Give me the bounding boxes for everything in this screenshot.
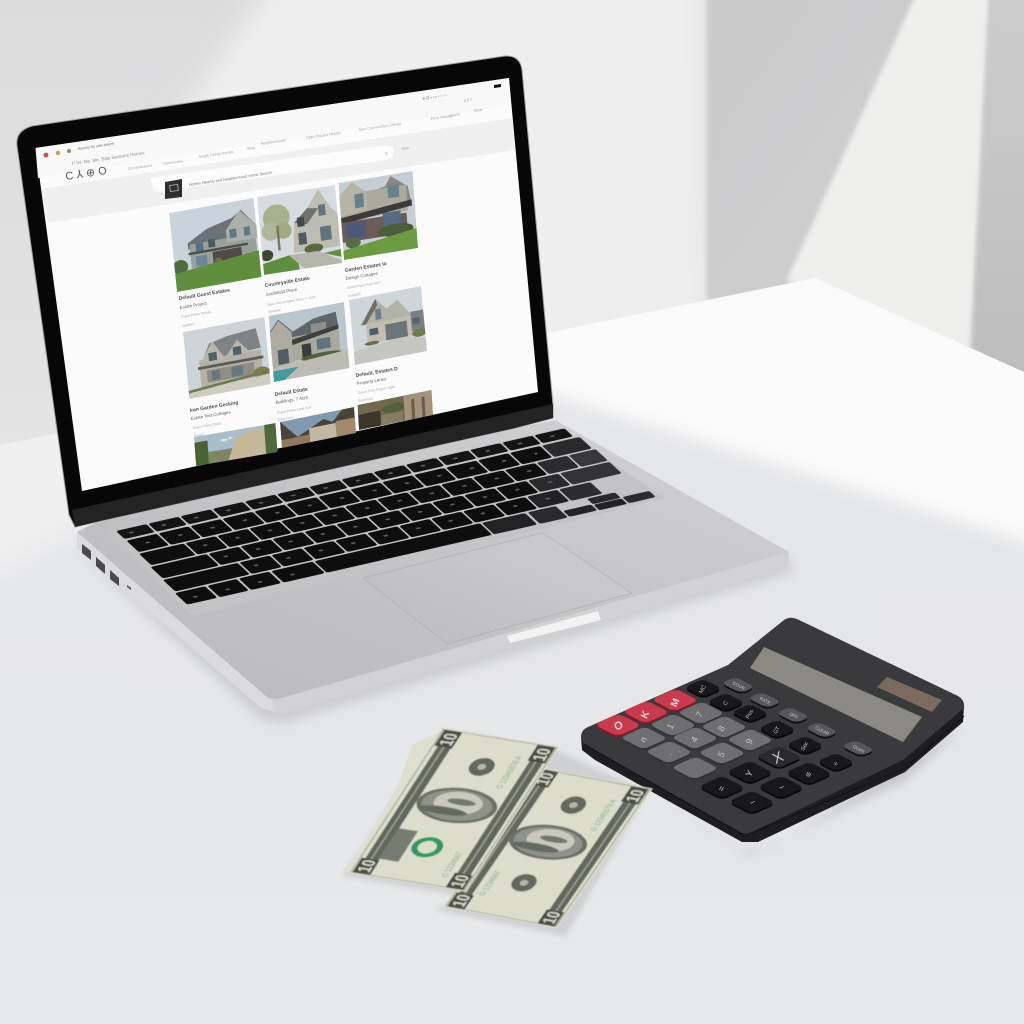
calculator key labels: OFF [789,711,799,720]
calculator key labels: Quant [852,744,866,754]
address bar [150,145,394,192]
solar panel [877,677,942,712]
browser header text: f l hs. ble. ble. Sale Sections Homes [71,150,146,166]
listing card 1 text: Default Guest Estates [178,287,231,302]
calculator key labels: 7 [694,710,705,719]
bill serials [477,787,619,907]
browser header text: Price History [431,114,452,121]
dollar bill front [348,728,560,892]
bill denomination [352,730,558,890]
listing card 3 photo [338,171,418,260]
bill denomination: 10 [436,732,463,747]
listing card 4 text: Guest Prices Detail [193,421,222,430]
calculator key labels: 4 [689,735,700,744]
listing card 3 text: Updated [348,292,361,298]
bill serials: G 1234567 [477,870,503,896]
keyboard keys [109,425,656,605]
listing card 4 text [189,400,239,438]
trackpad [363,533,632,644]
laptop [17,56,789,714]
calculator body edge [581,706,964,842]
calculator display [750,647,922,742]
calculator key labels: − [748,797,757,808]
lid hinge band [72,404,553,527]
laptop lid [17,56,553,527]
listing card 4 photo [183,317,271,399]
listing card 1 text: Estate Project [179,300,208,310]
browser header text: Townhouses [163,159,184,166]
wall background [0,0,1024,460]
black keys [684,679,855,813]
calculator key labels: K [639,709,653,721]
calculator key labels: ≡ [803,770,814,779]
listing card 6 text: Guest Price Report Table [358,385,396,395]
side ports [82,544,131,590]
calculator key labels: O [612,719,626,734]
listing card 4 text: Iran Garden Gecking [189,400,239,414]
calculator key labels: RATE [759,696,772,706]
calculator key labels [612,680,866,808]
calculator key labels: Sec [800,741,810,752]
listing card 1 text: Updated [182,322,195,328]
bill denomination [447,769,651,927]
calculator seam [585,716,964,836]
calculator key labels: 9 [744,737,755,746]
bill seal [464,756,499,778]
function keys [721,677,875,756]
cash shadow [342,730,648,936]
trackpad notch [507,611,601,643]
listing card 2 photo [255,185,342,275]
calculator key labels: CLEAR [814,725,831,737]
listing card 6 text: Default, Estates D [355,366,399,379]
listing card 5 text: Guest Prices Land Sort [277,405,312,415]
green seal [410,837,444,857]
listing card 5 text: Buildings, 7 Acre [275,395,309,405]
calculator key labels: − [777,782,786,793]
listing card 5 text: Default Estate [274,387,308,398]
calculator key labels: 1 [665,722,676,731]
bill denomination: 10 [529,747,556,762]
browser toolbar icons [422,84,501,103]
calculator key labels: ÷ [831,759,841,768]
bill border lines [446,769,650,927]
bill denomination: 10 [539,910,566,925]
browser tool bar band [41,118,515,223]
listing card 3 text: Garden Estates Io [344,261,387,274]
bill denomination: 10 [622,788,649,804]
listing card 9 photo [358,390,433,430]
calculator [581,618,964,842]
keyboard well [108,428,664,616]
listing card 3 text: Design Cottages [345,271,379,281]
listing card 2 text: Countryside Estate [264,275,310,289]
listing card 2 text: Updated [268,308,281,314]
browser header text: Agents [449,112,461,118]
table surface [0,278,1024,562]
bill seals [503,795,594,893]
calculator top face [581,618,964,834]
calculator key labels: = [716,784,727,793]
bill denomination: 10 [447,873,474,889]
listing card 4 text: Project [194,432,205,438]
bill serials [436,755,527,878]
listing card 1 text [178,287,231,328]
listing card 1 photo [167,198,262,292]
site logo [165,179,182,199]
gray keys [620,702,774,779]
calculator key labels: COUN [732,680,746,691]
listing card 2 text [264,275,315,314]
listing card 3 text: Detail Prices Add Sell T [347,280,382,290]
calculator key labels: Y [744,768,755,779]
browser header text: C ⅄ ⊕ O [65,165,108,183]
browser toolbar icons: d 0 f [463,97,473,103]
laptop base [77,420,789,714]
browser header text: Open Houses Nearby [306,131,341,140]
bill portrait [499,819,597,865]
calculator key labels: . [670,747,672,757]
listing card 1 text: Guest Prices Details [181,310,212,319]
listing card 6 text: Download [358,397,373,403]
calculator key labels: 8 [716,724,727,733]
browser header text: New Construction Listings [359,122,401,132]
bill denomination: 10 [532,771,559,787]
browser header text: Neighborhoods [261,138,286,146]
calculator key labels: C [723,700,730,707]
listing card 6 photo [349,286,428,365]
listing card 2 text: Southfield Place [265,287,298,297]
bill serials: G 12345678 A [589,799,619,832]
window controls [44,149,71,157]
listing card 7 photo [194,423,278,466]
browser tab strip [36,78,511,178]
listing card 8 photo [280,407,356,448]
browser header text: Condominiums [128,163,153,171]
calculator key labels: Pos [745,709,755,720]
red keys [594,689,699,736]
listing card 3 text [344,261,387,298]
bill serials: G 12345678 A [493,755,524,790]
listing card 2 text: Open House Agent Save — Sort [267,295,315,307]
browser toolbar icons: b ⊟ ▪ ▭ ▫ ▫ ▫ ▫ [422,92,448,101]
laptop screen [36,78,538,491]
calculator key labels: M [669,697,682,709]
listing card 5 text: Data Form [278,415,294,422]
listing card 6 text: Property Lanes [356,376,387,386]
listing card 4 text: Estate Test Cottages [190,409,232,421]
bill border lines [351,729,557,890]
browser header text: More [474,108,482,113]
site search line: Homes Nearby and Neighborhood Home Search [188,170,272,187]
money stack underneath [342,728,472,880]
browser header text: Houses for sale search [78,142,115,151]
screen base [36,78,538,491]
calculator key labels: X [770,748,786,768]
browser header text: Sale [402,146,409,151]
browser header text: Q [385,152,388,156]
browser header text [65,108,482,183]
dollar bill back [443,767,653,928]
listing card 6 text [355,366,399,403]
bill denomination: 10 [354,858,381,874]
calculator shadow [580,725,965,855]
calculator key labels: 5 [716,750,727,759]
bill denomination: 10 [449,893,476,908]
browser header text: Single Family Homes [199,150,234,159]
bill serials: G 1234567 [439,851,465,878]
laptop shadow [70,545,795,724]
calculator key labels: n [638,735,649,744]
bill text band [379,828,418,862]
calculator key labels: MC [698,684,708,695]
calculator key labels: GT [773,725,782,735]
listing card 5 photo [269,302,349,382]
listing card 5 text [274,387,312,422]
bill portrait [407,782,507,828]
browser header text: View [247,146,255,151]
